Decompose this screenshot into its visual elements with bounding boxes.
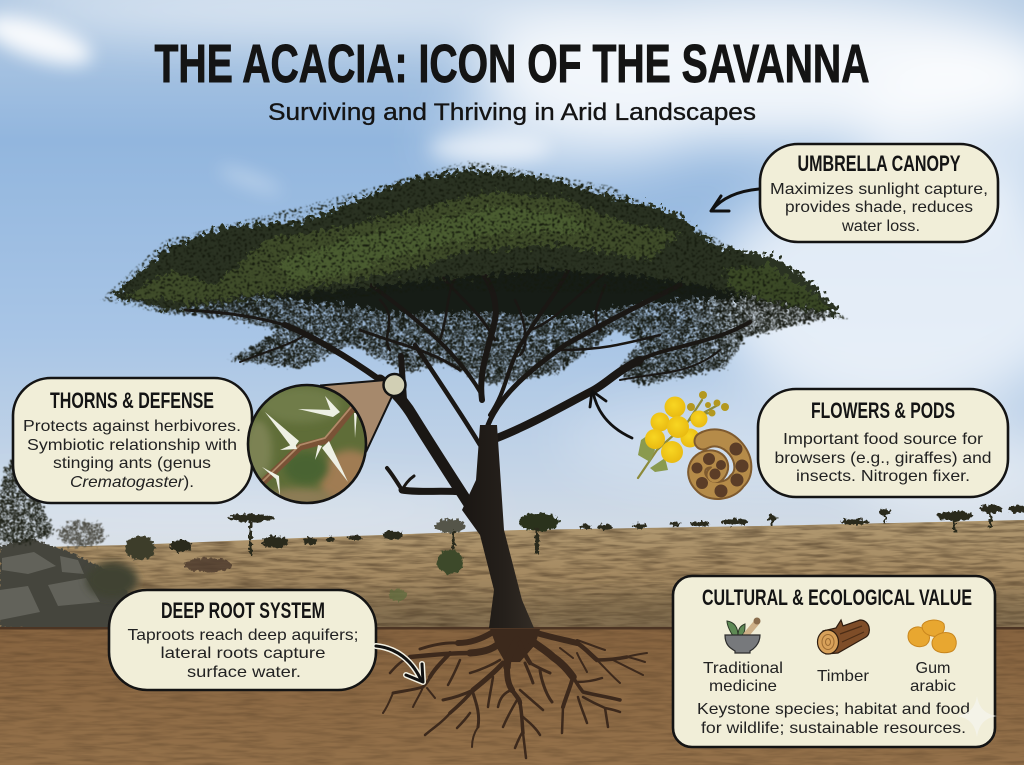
- arrow: flowers and pods: [590, 391, 632, 438]
- callout: thorns and defense: Crematogaster ).: [70, 474, 194, 491]
- arrow: umbrella canopy: [711, 189, 759, 211]
- callout: umbrella canopy: provides shade, reduces: [785, 199, 973, 216]
- callout: deep root system: [109, 590, 376, 690]
- panel summary text: Keystone species; habitat and food: [697, 701, 970, 718]
- savanna ground: [0, 520, 1024, 630]
- callout: thorns and defense: Protects against herbivores.: [23, 418, 241, 435]
- label: traditional medicine: medicine: [709, 678, 777, 695]
- sky background: [0, 0, 1024, 560]
- root system: [383, 629, 647, 758]
- branches: [185, 262, 750, 512]
- icon: acacia flowers: [638, 391, 729, 478]
- callout: flowers and pods: browsers (e.g., giraffes) and: [774, 450, 992, 467]
- arrow: deep root system: [376, 646, 423, 682]
- trunk: [462, 425, 534, 628]
- callout: umbrella canopy: water loss.: [841, 218, 920, 235]
- canopy: green crown: [112, 170, 842, 316]
- label: traditional medicine: [703, 660, 783, 695]
- magnifier: thorn close-up: [244, 374, 406, 514]
- label: gum arabic: arabic: [910, 678, 956, 695]
- callout: deep root system: DEEP ROOT SYSTEM: [161, 598, 325, 623]
- callout: thorns and defense: stinging ants (genus: [53, 455, 211, 472]
- callout: thorns and defense: Symbiotic relationship with: [27, 437, 237, 454]
- distant trees: [125, 505, 1024, 601]
- callout: thorns and defense: [13, 378, 252, 503]
- acacia tree: [100, 160, 850, 628]
- callout: deep root system: lateral roots capture: [160, 645, 326, 662]
- panel summary text: [697, 701, 970, 737]
- callout: umbrella canopy: Maximizes sunlight capture,: [770, 181, 988, 198]
- panel summary text: for wildlife; sustainable resources.: [701, 720, 966, 737]
- rocks and bushes at left: [0, 445, 138, 628]
- label: timber: Timber: [817, 668, 870, 685]
- subtitle: Surviving and Thriving in Arid Landscapes: [268, 99, 756, 126]
- label: traditional medicine: Traditional: [703, 660, 783, 677]
- icon: seed pod: [692, 438, 748, 498]
- callout: flowers and pods: Important food source for: [783, 431, 984, 448]
- callout: deep root system: Taproots reach deep aquifers;: [128, 627, 358, 644]
- callout: flowers and pods: insects. Nitrogen fixer.: [796, 468, 970, 485]
- panel: cultural and ecological value: [673, 576, 995, 747]
- soil cross-section: [0, 627, 1024, 765]
- icon: timber log: [818, 620, 869, 654]
- icon: sparkle: [957, 696, 997, 737]
- callout: thorns and defense: THORNS & DEFENSE: [50, 388, 214, 413]
- callout: umbrella canopy: [760, 144, 998, 242]
- callout: umbrella canopy: UMBRELLA CANOPY: [798, 151, 961, 176]
- icon: mortar and pestle: [725, 618, 760, 653]
- icon: gum arabic: [908, 620, 956, 653]
- label: gum arabic: Gum: [916, 660, 950, 677]
- label: gum arabic: [910, 660, 956, 695]
- callout: flowers and pods: [758, 389, 1008, 497]
- callout: flowers and pods: FLOWERS & PODS: [811, 398, 955, 423]
- callout: deep root system: surface water.: [187, 664, 301, 681]
- canopy: dark understory: [120, 250, 838, 385]
